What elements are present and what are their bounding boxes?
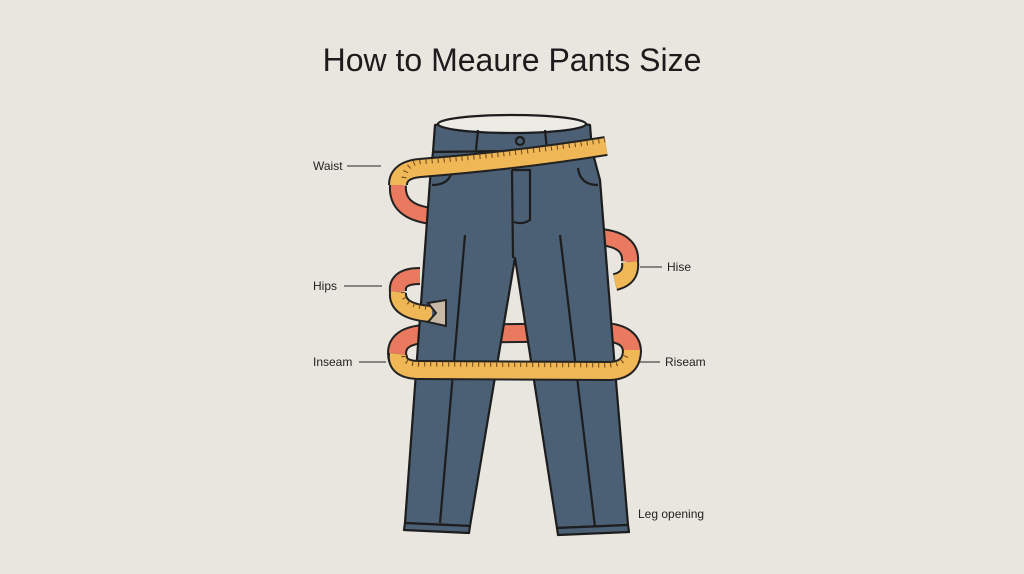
tape: hips xyxy=(398,262,630,326)
labels: Waist xyxy=(313,159,343,173)
tape: waist xyxy=(398,140,606,185)
labels: Hips xyxy=(313,279,337,293)
pants xyxy=(404,115,629,535)
labels: Inseam xyxy=(313,355,352,369)
title: How to Meaure Pants Size xyxy=(323,42,701,78)
labels xyxy=(313,159,706,521)
labels: Hise xyxy=(667,260,691,274)
tape: thigh/inseam xyxy=(398,350,632,371)
labels: Leg opening xyxy=(638,507,704,521)
back tape pieces xyxy=(397,185,632,360)
labels: Riseam xyxy=(665,355,706,369)
